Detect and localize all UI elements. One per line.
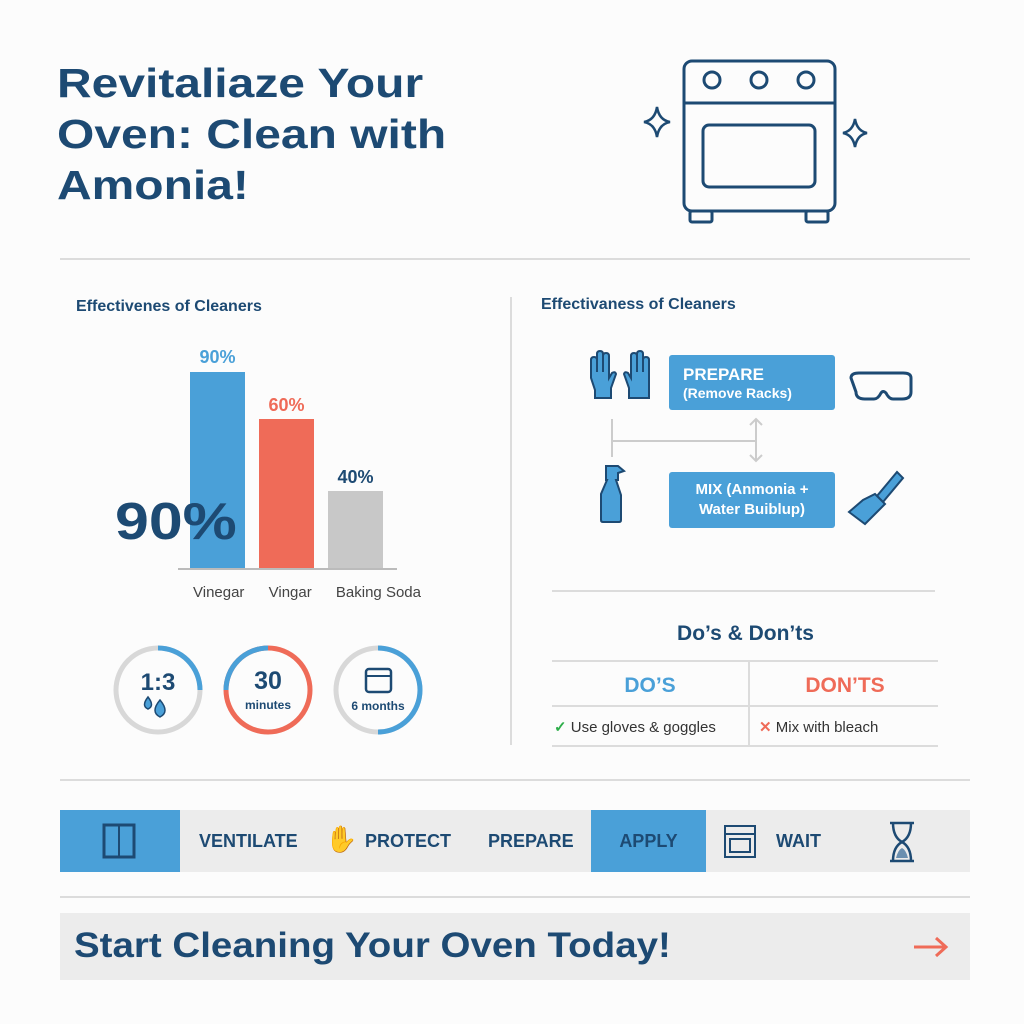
step: apply: [591, 810, 706, 872]
step: prepare: [669, 355, 835, 410]
step: prepare: (Remove Racks): [683, 385, 792, 401]
column: donts: DON’TS: [805, 674, 885, 697]
axis labels: Vinegar: [193, 584, 244, 601]
stat circles: 6 months: [351, 699, 405, 713]
bar: vingar 60%: [259, 419, 314, 569]
stat circles: 1:3: [141, 669, 175, 696]
title: Amonia!: [57, 162, 249, 208]
panel: bar chart: 40%: [337, 467, 374, 487]
step: prepare: PREPARE: [683, 365, 764, 384]
heading: Do’s & Don’ts: [677, 622, 814, 645]
panel: dos and donts: [552, 590, 938, 747]
bar: baking soda 40%: [328, 491, 383, 569]
step: prepare: PREPARE: [488, 831, 574, 851]
stat circles: [114, 646, 422, 734]
do item: ✓ Use gloves & goggles: [554, 719, 716, 736]
icon: goggles: [850, 372, 912, 400]
icon: hourglass: [890, 822, 914, 862]
column: dos: DO’S: [624, 674, 676, 697]
step: ventilate: VENTILATE: [199, 831, 298, 851]
big stat 90%: 90%: [115, 493, 237, 551]
process banner: [60, 810, 970, 872]
call to action: Start Cleaning Your Oven Today!: [74, 926, 671, 965]
dont item: ✕ Mix with bleach: [759, 719, 878, 736]
step: apply: APPLY: [619, 831, 678, 851]
panel: bar chart: 60%: [268, 395, 305, 415]
icon: arrow: [914, 937, 948, 957]
icon: hand: ✋: [325, 824, 357, 854]
step: door icon: [60, 810, 180, 872]
stat circles: minutes: [245, 698, 291, 712]
title: [57, 60, 446, 208]
axis labels: Vingar: [269, 584, 312, 601]
stat circles: 30: [254, 667, 282, 695]
title: Revitaliaze Your: [57, 60, 423, 106]
heading: effectiveness: Effectivenes of Cleaners: [76, 298, 262, 315]
axis labels: Baking Soda: [336, 584, 421, 601]
axis labels: [193, 584, 421, 601]
panel: steps: [541, 296, 912, 528]
call to action: [60, 913, 970, 980]
icon: gloves: [590, 350, 650, 399]
step: mix: MIX (Anmonia +: [696, 481, 808, 498]
connector: [611, 418, 762, 462]
icon: oven: [644, 60, 868, 224]
step: protect: PROTECT: [365, 831, 451, 851]
step: mix: Water Buiblup): [699, 501, 805, 518]
panel: bar chart: [76, 298, 421, 601]
step: mix: [669, 472, 835, 528]
icon: brush: [848, 470, 904, 526]
bar values: 90%: [199, 347, 236, 367]
step: wait: WAIT: [776, 831, 821, 851]
title: Oven: Clean with: [57, 111, 446, 157]
heading: Effectivaness of Cleaners: [541, 296, 736, 313]
icon: oven small: [724, 825, 756, 858]
icon: spray bottle: [600, 465, 626, 523]
bar: vinegar 90%: [190, 372, 245, 569]
